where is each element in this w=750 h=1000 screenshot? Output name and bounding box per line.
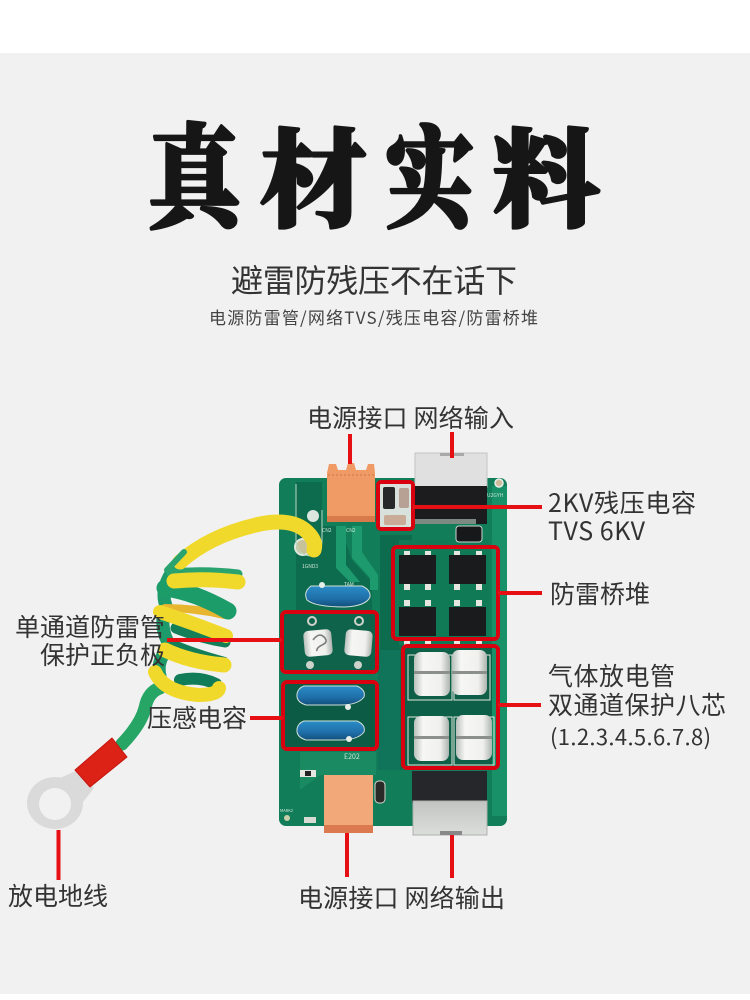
silkscreen labels: TAM: [344, 581, 354, 588]
bottom coil: [180, 679, 216, 684]
bottom power connector: [324, 775, 373, 833]
title: 真: [148, 90, 256, 251]
board dark copper areas: [284, 482, 507, 816]
title: 实: [386, 92, 479, 250]
TVS and residual-voltage capacitors: [378, 482, 413, 529]
callout: 2KV capacitor / TVS: 2KV残压电容: [548, 484, 696, 520]
title: [148, 90, 599, 251]
callout: single channel tubes: 保护正负极: [40, 636, 165, 672]
callout: power connector and network output (bottom): 电源接口 网络输出: [298, 879, 505, 915]
gas discharge tubes: [403, 646, 498, 768]
callout: 2KV capacitor / TVS: [413, 484, 696, 548]
silkscreen labels: CN2: [346, 527, 356, 534]
ring terminal: [27, 770, 94, 829]
component summary line: 电源防雷管/网络TVS/残压电容/防雷桥堆: [209, 304, 538, 329]
fourth coil: [172, 642, 225, 660]
bridge rectifier stack: [393, 547, 498, 645]
left side of coil column: [159, 572, 172, 676]
callout: discharge ground wire: 放电地线: [8, 877, 108, 913]
mounting hole and pad: [295, 479, 503, 556]
small fuse and bottom SMD parts: [284, 770, 385, 823]
callout: single channel tubes: 单通道防雷管: [15, 608, 165, 644]
single-channel surge tubes: [282, 612, 377, 672]
silkscreen labels: U2GYH: [487, 492, 503, 499]
callout: gas discharge tube: [498, 657, 726, 752]
second coil: [165, 588, 228, 611]
silkscreen labels: MARK2: [280, 808, 294, 814]
grounding wire: [27, 522, 315, 829]
silkscreen labels: [280, 492, 503, 814]
callout: single channel tubes: [15, 608, 282, 672]
callout: discharge ground wire: [8, 830, 108, 913]
callout: gas discharge tube: 双通道保护八芯: [548, 686, 726, 722]
silkscreen labels: E202: [344, 752, 360, 762]
callout: varistors: 压感电容: [147, 699, 247, 735]
wire lead to red terminal: [122, 688, 160, 744]
bottom network port: [412, 771, 487, 835]
callout: 2KV capacitor / TVS: TVS 6KV: [548, 512, 646, 548]
lower varistors: [283, 682, 377, 749]
board base: [279, 478, 507, 826]
title: 材: [260, 97, 366, 249]
subtitle: 避雷防残压不在话下: [231, 256, 517, 302]
top network port: [414, 453, 487, 542]
top lead: [180, 522, 315, 562]
callout: bridge stack: 防雷桥堆: [550, 575, 650, 611]
red crimp sleeve: [75, 738, 127, 787]
title: 料: [493, 97, 599, 249]
top coil: [171, 572, 238, 574]
third coil: [176, 628, 225, 642]
top varistor: [306, 582, 370, 607]
callout: gas discharge tube: 气体放电管: [548, 657, 675, 693]
silkscreen labels: 1GND3: [302, 563, 318, 570]
callout: network input and power connector (top): 电源接口 网络输入: [307, 399, 514, 435]
top power connector: [327, 463, 375, 522]
callout: gas discharge tube: (1.2.3.4.5.6.7.8): [550, 720, 711, 752]
silkscreen labels: CN2: [322, 527, 332, 534]
circuit board: [279, 453, 507, 835]
